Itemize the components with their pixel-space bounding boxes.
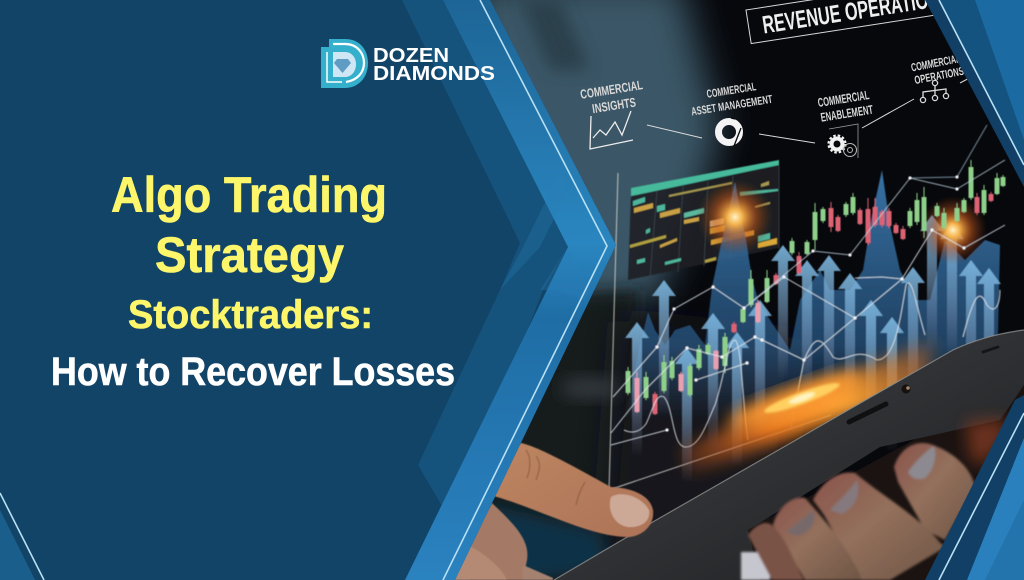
title: [51, 167, 455, 394]
title: How to Recover Losses: [51, 350, 455, 394]
chevron highlight strips: [500, 172, 590, 300]
label: commercial insights: COMMERCIAL: [579, 77, 644, 102]
icon: org tree: [920, 80, 949, 103]
trend lines: [611, 125, 1005, 447]
candlesticks: [628, 160, 1003, 415]
chevron white line: [443, 0, 607, 580]
chart axes: [609, 173, 831, 490]
hand: index finger: [486, 443, 653, 537]
connector lines: [647, 75, 975, 143]
label: commercial operations: [910, 53, 965, 87]
label: commercial operations: COMMERCIAL: [910, 53, 961, 74]
icon: line chart: [590, 111, 633, 149]
logo wordmark: DOZEN: [373, 45, 449, 67]
glow spots: [697, 179, 987, 264]
chevron middle band: [402, 0, 568, 523]
label: commercial operations: OPERATIONS: [914, 66, 965, 87]
hand: lower left fingers: [448, 503, 553, 580]
label: commercial asset management: ASSET MANAGEMENT: [690, 94, 773, 119]
label: commercial enablement: COMMERCIAL: [817, 88, 871, 110]
corner accent: [0, 510, 35, 580]
label: commercial enablement: ENABLEMENT: [820, 103, 874, 125]
label: commercial insights: [579, 77, 646, 118]
hologram trading chart: [609, 125, 1005, 490]
title: Algo Trading: [111, 167, 387, 223]
title: Strategy: [155, 227, 344, 283]
panel: top right corner: [925, 0, 1024, 187]
icon: donut chart: [718, 118, 741, 146]
logo mark: [321, 39, 368, 88]
label: commercial enablement: [817, 88, 874, 125]
logo: Dozen Diamonds: DIAMONDS: [373, 63, 495, 85]
data table panel: [628, 160, 779, 280]
title: Stocktraders:: [128, 293, 373, 337]
orange light flare: [680, 340, 935, 475]
logo: Dozen Diamonds: [321, 39, 495, 88]
upward arrows: [625, 215, 1001, 483]
chart node dots: [655, 175, 966, 432]
icon: gears: [828, 124, 858, 158]
panel: bottom right corner: [925, 395, 1024, 580]
panel: left chevron: [0, 0, 616, 580]
photo background: [470, 0, 1024, 580]
label: commercial asset management: [688, 79, 773, 119]
chevron bright band: [405, 0, 616, 580]
dark area behind right hand: [748, 380, 1024, 580]
hand: right fingers: [741, 419, 1007, 580]
label: commercial insights: INSIGHTS: [591, 94, 637, 116]
tablet: [554, 330, 1024, 580]
label: commercial asset management: COMMERCIAL: [706, 81, 757, 101]
market silhouettes: [625, 170, 1000, 420]
